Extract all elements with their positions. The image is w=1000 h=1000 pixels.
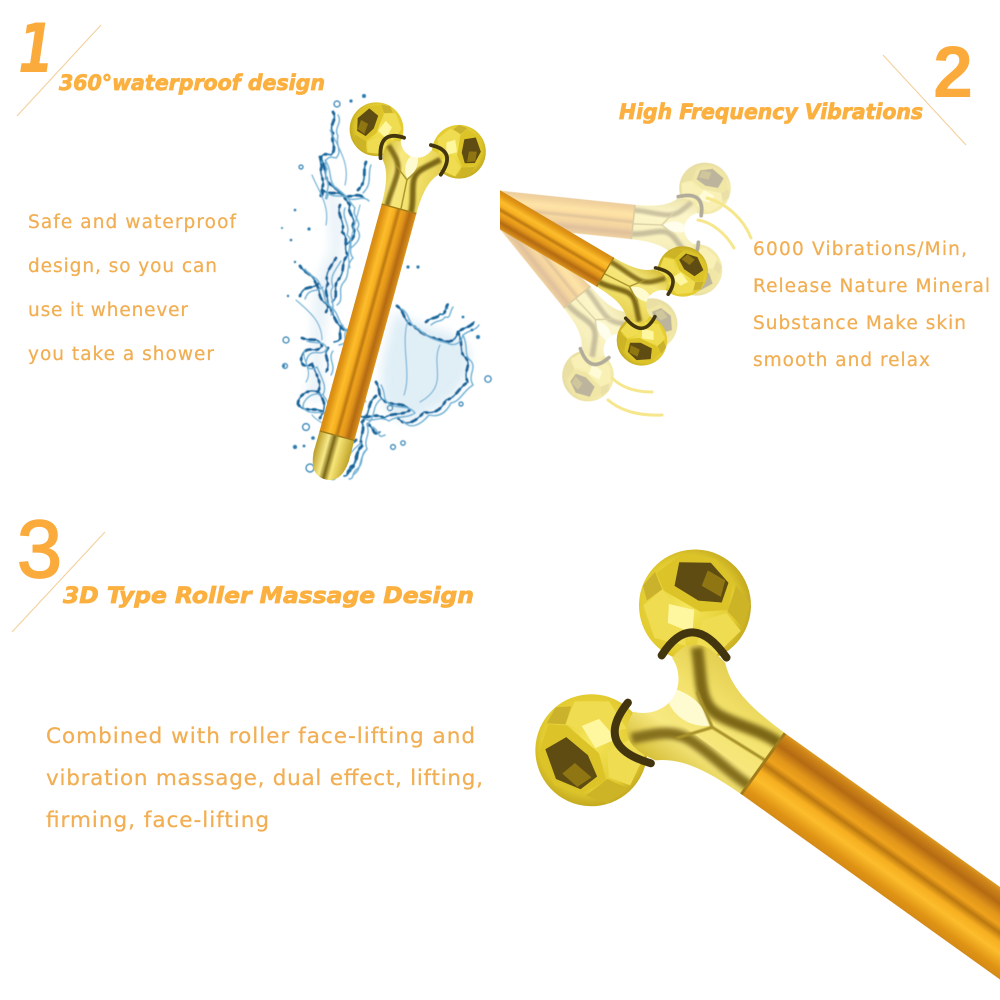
water splash: [281, 94, 491, 480]
large roller shaft: [742, 734, 1000, 980]
divider line 1: [17, 25, 101, 116]
text block: vibration description: 6000 Vibrations/Min,: [753, 239, 967, 260]
number 2: 2: [933, 32, 973, 113]
number 3: 3: [17, 504, 62, 595]
text block: vibration description: smooth and relax: [753, 350, 930, 371]
text block: waterproof description: you take a shower: [28, 344, 214, 365]
text block: waterproof description: use it whenever: [28, 300, 188, 321]
number 1: 1: [18, 10, 54, 89]
text block: roller description: vibration massage, dual effect, lifting,: [46, 766, 483, 791]
ghost roller upper: [500, 162, 731, 296]
heading: 360 waterproof design: 360°waterproof design: [59, 71, 325, 95]
divider line 3: [12, 532, 105, 632]
text block: vibration description: Release Nature Mineral: [753, 276, 990, 297]
text block: roller description: firming, face-lifting: [46, 808, 269, 833]
large roller close-up: [513, 527, 1000, 980]
vibration arcs: [608, 198, 751, 415]
divider line 2: [883, 55, 966, 145]
large roller head: [513, 527, 850, 883]
text block: vibration description: Substance Make skin: [753, 313, 966, 334]
text block: roller description: Combined with roller face-lifting and: [46, 724, 475, 749]
text block: waterproof description: Safe and waterproof: [28, 212, 236, 233]
text block: waterproof description: design, so you can: [28, 256, 217, 277]
text block: roller description: [46, 724, 483, 833]
vibrating roller illustration: [500, 162, 752, 417]
heading: high frequency vibrations: High Frequency Vibrations: [619, 100, 923, 124]
heading: 3D type roller massage design: 3D Type Roller Massage Design: [63, 584, 474, 609]
main roller: [448, 143, 717, 375]
ghost roller lower: [500, 230, 678, 402]
text block: waterproof description: [28, 212, 236, 365]
roller 1 with water: [258, 96, 492, 498]
text block: vibration description: [753, 239, 990, 371]
